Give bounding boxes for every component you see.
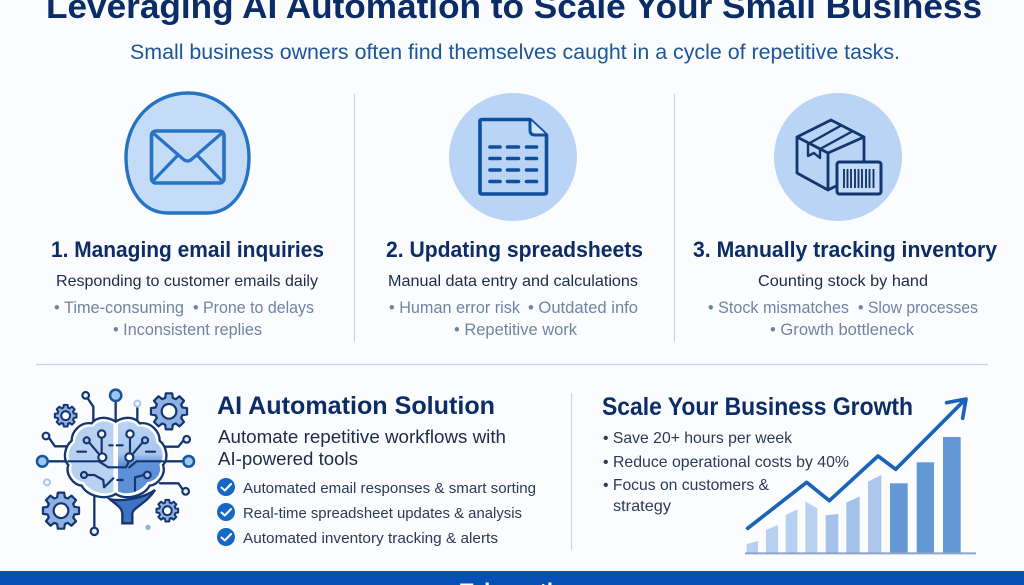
benefits list: strategy: [613, 498, 671, 515]
bullet points: • Time-consuming: [54, 298, 184, 317]
description: Responding to customer emails daily: [56, 273, 318, 290]
checklist: Automated inventory tracking & alerts: [243, 530, 498, 547]
bullet points: [708, 298, 978, 339]
benefits list: • Focus on customers &: [603, 477, 769, 494]
bullet points: • Slow processes: [858, 298, 978, 317]
bullet points: • Outdated info: [528, 298, 638, 317]
heading: AI Automation Solution: [217, 392, 495, 420]
panel: AI automation solution: [217, 392, 536, 547]
growth chart: [745, 399, 976, 553]
checklist: Automated email responses & smart sorting: [243, 480, 536, 497]
subtitle: Small business owners often find themselves caught in a cycle of repetitive tasks.: [130, 41, 900, 64]
bullet points: • Prone to delays: [193, 298, 314, 317]
heading: Scale Your Business Growth: [602, 393, 913, 421]
panel: updating spreadsheets: [386, 93, 643, 339]
bullet points: • Inconsistent replies: [113, 320, 262, 339]
description: Counting stock by hand: [758, 273, 928, 290]
description: AI-powered tools: [218, 448, 358, 469]
checklist: [217, 478, 536, 547]
panel: managing email inquiries: [51, 93, 324, 339]
heading: 3. Manually tracking inventory: [693, 237, 998, 262]
icon: box with barcode: [774, 93, 902, 221]
benefits list: • Reduce operational costs by 40%: [603, 454, 849, 471]
benefits list: • Save 20+ hours per week: [603, 430, 793, 447]
heading: 2. Updating spreadsheets: [386, 237, 643, 262]
bullet points: [389, 298, 638, 339]
bullet points: [54, 298, 314, 339]
description: [218, 426, 506, 469]
icon: spreadsheet document: [449, 93, 577, 221]
checklist: Real-time spreadsheet updates & analysis: [243, 505, 522, 522]
panel: scale your business growth: [602, 393, 976, 553]
panel: manually tracking inventory: [693, 93, 998, 339]
bullet points: • Repetitive work: [454, 320, 577, 339]
bullet points: • Stock mismatches: [708, 298, 849, 317]
description: Manual data entry and calculations: [388, 273, 638, 290]
bullet points: • Human error risk: [389, 298, 520, 317]
bullet points: • Growth bottleneck: [770, 320, 914, 339]
icon: envelope: [126, 93, 249, 213]
description: Automate repetitive workflows with: [218, 426, 506, 447]
benefits list: [603, 430, 849, 515]
heading: 1. Managing email inquiries: [51, 237, 324, 262]
footer bar: [0, 571, 1024, 585]
icon: AI brain with circuits and gears: [37, 390, 194, 535]
